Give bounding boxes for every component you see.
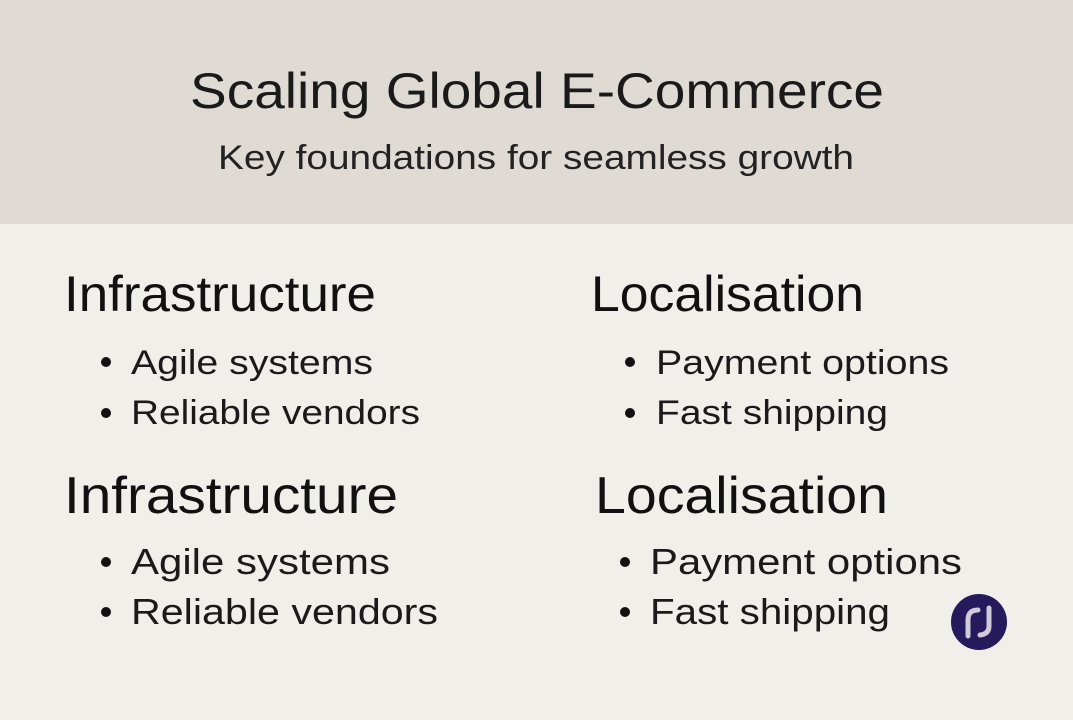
panel: infrastructure top: Agile systems (131, 344, 373, 382)
panel: infrastructure bottom: Reliable vendors (131, 591, 438, 632)
panel: localisation bottom: Payment options (650, 541, 962, 582)
panel: localisation bottom: Localisation (595, 467, 888, 525)
panel: localisation top (591, 266, 949, 432)
title: Scaling Global E-Commerce (190, 63, 884, 119)
header band (0, 0, 1073, 224)
panel: infrastructure bottom: Agile systems (131, 541, 390, 582)
panel: localisation bottom: Fast shipping (650, 591, 890, 632)
panel: infrastructure top (64, 266, 420, 432)
icon: logo (951, 594, 1007, 650)
panel: localisation top: Localisation (591, 266, 864, 322)
panel: infrastructure top: Reliable vendors (131, 394, 420, 432)
panel: localisation bottom (595, 467, 962, 632)
panel: infrastructure top: Infrastructure (64, 266, 376, 322)
panel: infrastructure bottom (64, 467, 438, 632)
subtitle: Key foundations for seamless growth (218, 139, 854, 177)
panel: localisation top: Fast shipping (656, 394, 888, 432)
panel: infrastructure bottom: Infrastructure (64, 467, 398, 525)
panel: localisation top: Payment options (656, 344, 949, 382)
